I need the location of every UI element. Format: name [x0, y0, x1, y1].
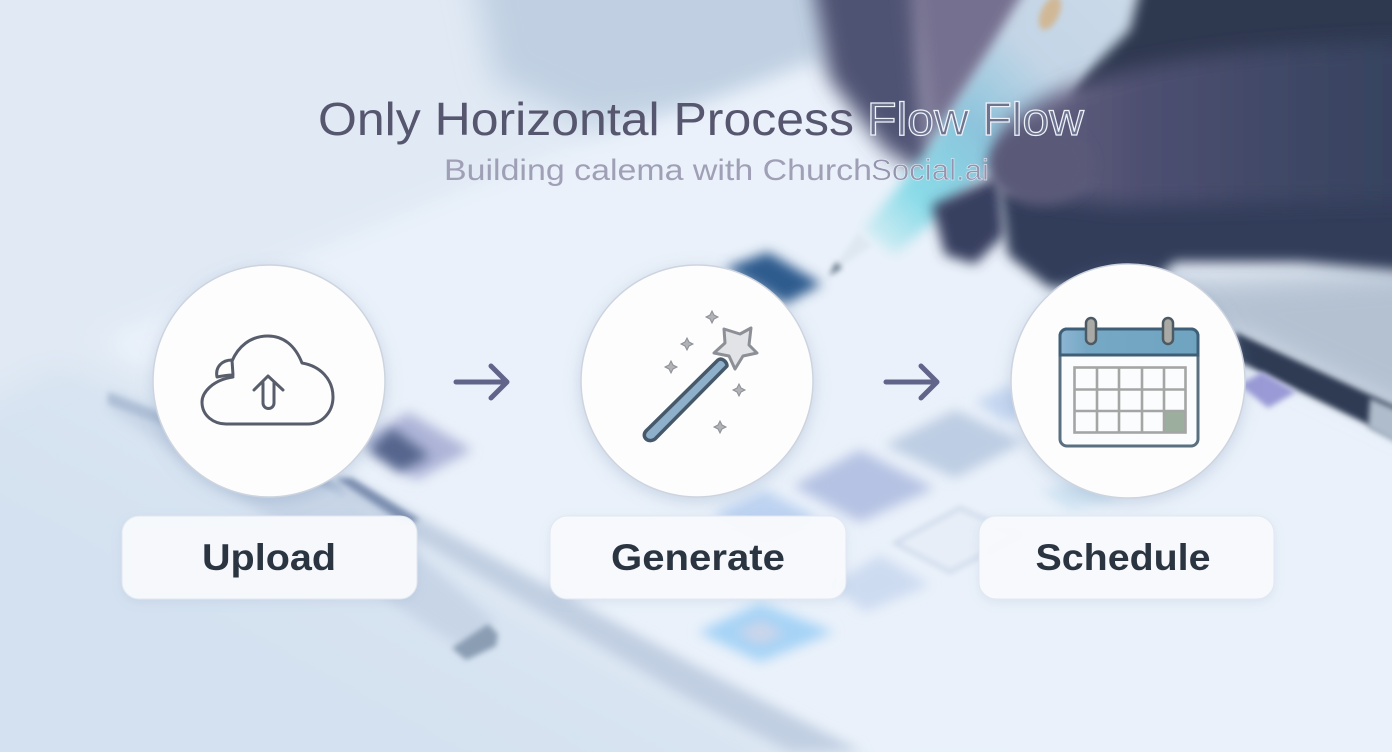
stylus lying on the table [108, 392, 495, 652]
tile: dark blue [725, 252, 822, 304]
subtitle: Social.ai [871, 154, 989, 187]
arrow 1 [456, 366, 507, 398]
stylus point [829, 262, 842, 276]
icon: cloud upload [202, 336, 333, 424]
app tiles on screen [362, 252, 1296, 662]
label: generate: Generate [611, 537, 785, 578]
tile: outline [895, 508, 1020, 572]
label: schedule: Schedule [1036, 537, 1210, 578]
tile: purple/dark [362, 412, 472, 480]
tile: bright blue [698, 603, 834, 662]
tile: periwinkle [793, 450, 934, 522]
label card: upload [122, 516, 417, 599]
icon: calendar [1060, 318, 1198, 446]
step 3: schedule [979, 264, 1274, 599]
tile: cyan under calendar [1040, 480, 1120, 510]
tablet edge band [335, 478, 862, 752]
stylus in hand [862, 0, 1145, 255]
subtitle: Building calema with Church [444, 154, 872, 187]
title: Flow Flow [867, 93, 1085, 145]
tile: blue-grey [885, 410, 1024, 478]
step 1: upload [122, 265, 417, 599]
upper-left table area [0, 0, 820, 430]
tile: purple inner [368, 428, 430, 472]
label card: generate [550, 516, 846, 599]
left finger [810, 0, 932, 178]
right pen silver band [1368, 398, 1392, 456]
tile: pale [830, 555, 930, 612]
title [318, 93, 1085, 145]
hand: lower fingers and thumb [932, 40, 1392, 288]
right-side dark pen [1235, 332, 1392, 450]
thumb [988, 125, 1092, 205]
subtitle [444, 154, 989, 187]
lower knuckle [932, 175, 1004, 264]
arrow 2 [886, 366, 937, 398]
dark tablet edge accent [335, 478, 420, 524]
icon: magic wand [644, 311, 757, 441]
title: Only Horizontal Process [318, 93, 854, 145]
background blob: grey device top [470, 0, 850, 125]
middle finger [908, 0, 1045, 150]
label: upload: Upload [202, 537, 336, 578]
tile: light blue below generate [712, 490, 818, 538]
skin tone accent [1034, 0, 1066, 33]
circle: upload [153, 265, 385, 497]
circle: generate [581, 265, 813, 497]
stylus tip [829, 232, 872, 274]
step 2: generate [550, 265, 846, 599]
stylus upper shadow line [108, 392, 345, 496]
stylus end cap [452, 624, 498, 660]
circle: schedule [1011, 264, 1245, 498]
grey table behind right side [1120, 265, 1392, 440]
lower fingers [1000, 140, 1392, 288]
hand: upper fingers [810, 0, 1392, 178]
tile: behind calendar left [975, 385, 1035, 422]
tile: corner purple [1240, 372, 1296, 408]
label card: schedule [979, 516, 1274, 599]
tile: bright blue inner [735, 620, 785, 645]
dark back of hand [1070, 0, 1392, 100]
big finger [1000, 40, 1392, 205]
